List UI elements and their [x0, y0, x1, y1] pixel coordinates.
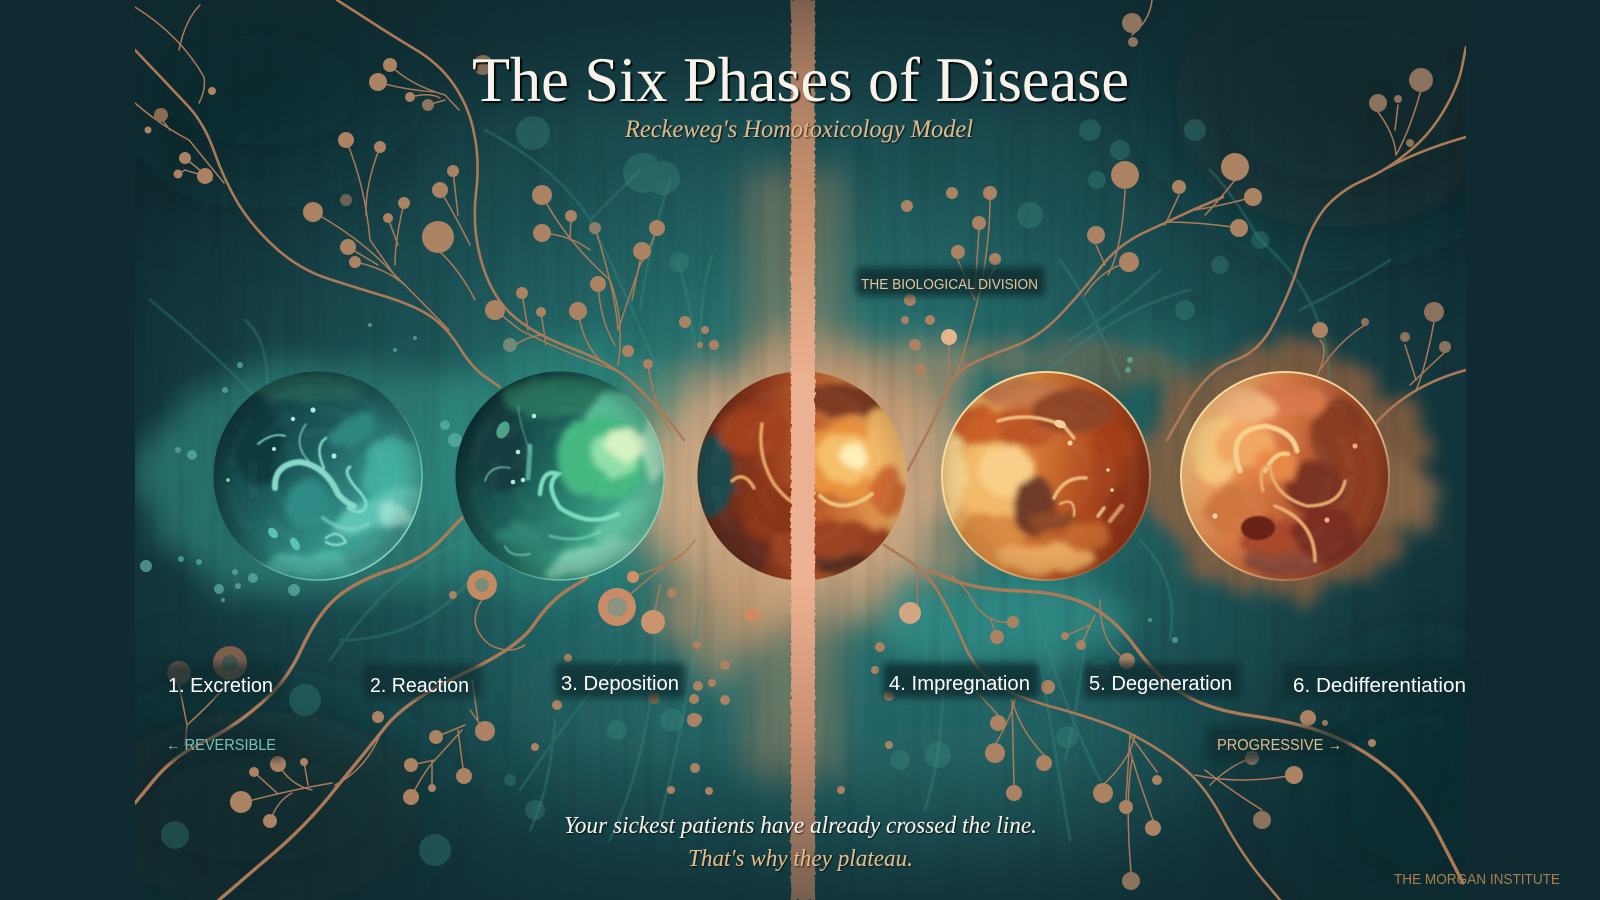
- reversible arrow label: [157, 727, 285, 761]
- central peach haze: [595, 320, 1005, 670]
- label: 3. deposition: 3. Deposition: [561, 672, 679, 695]
- peach glow along the division: [745, 170, 845, 780]
- sphere 4: impregnation: [941, 371, 1151, 581]
- dark corners: [256, 93, 1401, 828]
- sphere 3: deposition: [696, 371, 907, 581]
- label: 3. deposition: [555, 663, 685, 698]
- teal glow behind reversible spheres: [135, 340, 710, 600]
- label: 2. reaction: [363, 664, 481, 698]
- faint teal flora: [150, 130, 1390, 840]
- label: 1. excretion: [159, 664, 282, 698]
- brush streak texture: [666, 336, 940, 656]
- teal wash below and right of centre: [880, 315, 1210, 665]
- closing statement: Your sickest patients have already crossed the line.: [564, 813, 1037, 839]
- reversible arrow label: ← REVERSIBLE: [166, 737, 276, 754]
- top and bottom vignette: [489, 0, 1151, 900]
- brush arcs: [472, 388, 648, 564]
- closing statement: [564, 813, 1037, 872]
- label: 6. dedifferentiation: [1283, 664, 1475, 698]
- brush arcs: [714, 388, 890, 564]
- progressive arrow label: [1207, 727, 1350, 761]
- swirl: [732, 424, 872, 506]
- label: 6. dedifferentiation: 6. Dedifferentiation: [1293, 674, 1466, 697]
- brush arcs: [230, 388, 406, 564]
- brush arcs: [1197, 388, 1373, 564]
- label: the biological division: THE BIOLOGICAL DIVISION: [861, 276, 1038, 293]
- sphere 5: degeneration: [1180, 371, 1390, 581]
- faint teal flora blobs: [161, 116, 1269, 866]
- orange splash around spheres 5 and 6: [950, 340, 1440, 597]
- central division bar: [791, 0, 815, 900]
- subtitle: Reckeweg's Homotoxicology Model: [624, 116, 973, 143]
- swirl: [485, 406, 618, 555]
- label: the biological division: [856, 267, 1045, 296]
- sphere 2: reaction: [455, 371, 671, 584]
- copper seed pods: [144, 13, 1451, 890]
- swirl: [1236, 426, 1345, 561]
- closing statement: That's why they plateau.: [688, 846, 913, 872]
- title: The Six Phases of Disease: [472, 45, 1129, 115]
- swirl: [998, 417, 1122, 521]
- brush arcs: [958, 388, 1134, 564]
- swirl: [258, 424, 368, 545]
- sphere 1: excretion: [213, 371, 429, 581]
- lower teal glow: [816, 708, 1150, 848]
- label: 2. reaction: 2. Reaction: [370, 674, 469, 697]
- progressive arrow label: PROGRESSIVE →: [1217, 737, 1342, 754]
- label: 4. impregnation: 4. Impregnation: [889, 672, 1030, 695]
- teal speckles: [140, 323, 1178, 643]
- label: 1. excretion: 1. Excretion: [168, 674, 273, 697]
- credit: THE MORGAN INSTITUTE: [1394, 871, 1560, 888]
- label: 5. degeneration: 5. Degeneration: [1089, 672, 1232, 695]
- label: 5. degeneration: [1084, 663, 1240, 698]
- label: 4. impregnation: [883, 663, 1039, 698]
